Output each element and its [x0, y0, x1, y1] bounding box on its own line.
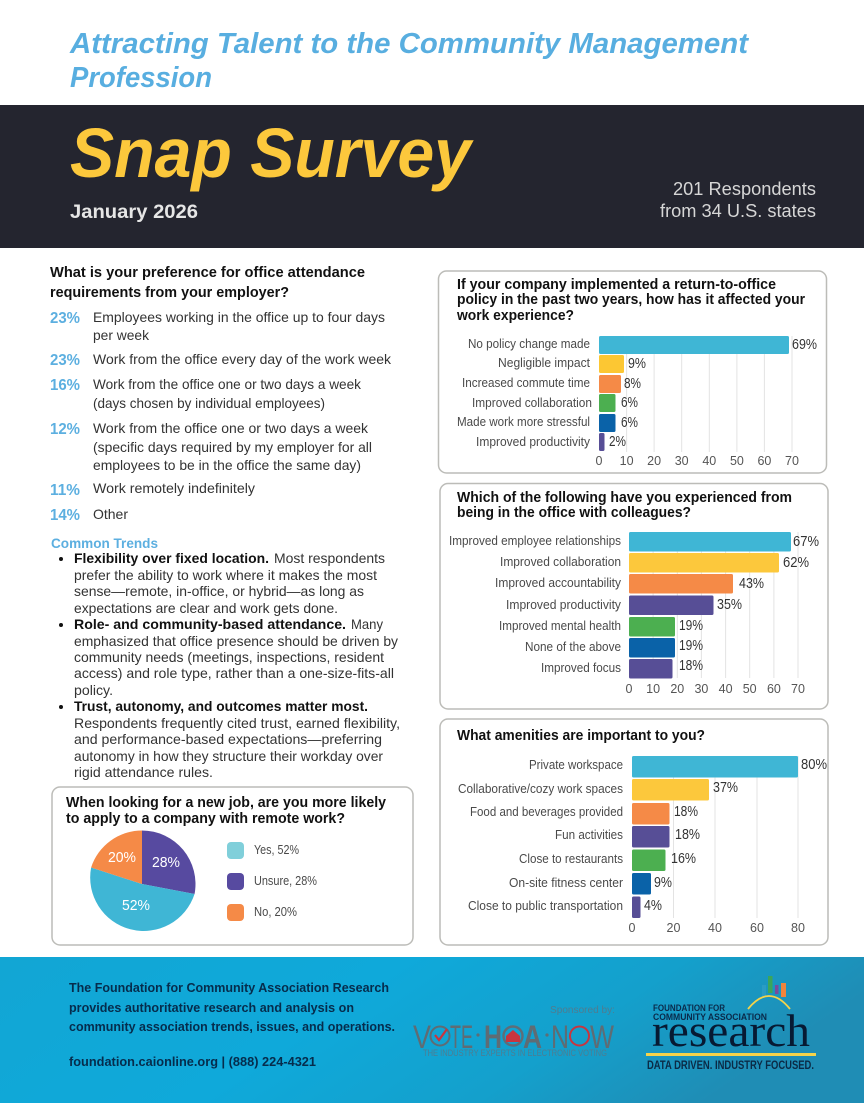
bar chart: 69%: [792, 337, 817, 353]
bar chart: 19%: [679, 638, 703, 654]
bullet: role and community: community needs (meetings, inspections, resident: [74, 649, 384, 665]
percentages: 14%: [50, 507, 80, 524]
heading: [50, 265, 365, 301]
bar chart: [449, 532, 819, 696]
bar chart: 6%: [621, 395, 638, 411]
heading: [457, 490, 792, 521]
bar chart: Improved productivity: [506, 598, 622, 612]
heading: policy in the past two years, how has it affected your: [457, 292, 805, 308]
bar chart: 40: [719, 682, 733, 696]
heading: [66, 795, 386, 827]
legend: Unsure, 28%: [254, 873, 317, 888]
bar chart: Improved focus: [541, 661, 621, 675]
legend: Yes, 52%: [254, 842, 299, 857]
panel: experienced in the office: [440, 484, 828, 709]
bar chart: Made work more stressful: [457, 415, 590, 429]
panel: return-to-office effect: [438, 271, 826, 473]
bullet: flexibility: prefer the ability to work where it makes the most: [74, 567, 377, 583]
bullet: trust and autonomy: [59, 698, 400, 780]
bar chart: 0: [596, 454, 603, 468]
bar chart: 40: [708, 921, 722, 935]
bar chart: On-site fitness center: [509, 876, 623, 890]
legend: [227, 842, 317, 921]
bar chart: Fun activities: [555, 828, 623, 842]
heading: being in the office with colleagues?: [457, 505, 691, 521]
heading: to apply to a company with remote work?: [66, 811, 345, 827]
bullet: flexibility: expectations are clear and work gets done.: [74, 600, 338, 616]
sponsor logo: Vote HOA Now: W: [590, 1019, 615, 1055]
percentages: 23%: [50, 310, 80, 327]
heading: Which of the following have you experienced from: [457, 490, 792, 506]
sponsor logo: Vote HOA Now: A: [523, 1019, 542, 1055]
bullet: flexibility: Most respondents: [274, 550, 385, 566]
logo: Foundation research: COMMUNITY ASSOCIATION: [653, 1012, 767, 1022]
responses: Work from the office one or two days a week: [93, 376, 362, 392]
foundation description: provides authoritative research and analysis on: [69, 1000, 354, 1015]
bar chart: 10: [620, 454, 634, 468]
bar chart: 18%: [674, 804, 698, 820]
responses: employees to be in the office the same day): [93, 457, 361, 473]
heading: When looking for a new job, are you more likely: [66, 795, 386, 811]
bar chart: Improved mental health: [499, 619, 621, 633]
bar chart: 35%: [717, 597, 742, 613]
bar chart: Negligible impact: [498, 356, 591, 370]
sponsor logo: Vote HOA Now: Sponsored by:: [550, 1005, 615, 1016]
bar chart: 20: [647, 454, 661, 468]
header band: [0, 105, 864, 248]
bar chart: 60: [750, 921, 764, 935]
bar chart: 18%: [675, 827, 700, 843]
bar chart: 18%: [679, 658, 703, 674]
percentages: [50, 310, 80, 524]
bar chart: 30: [675, 454, 689, 468]
pie chart: 52%: [122, 897, 150, 914]
bar chart: None of the above: [525, 640, 621, 654]
bar chart: 6%: [621, 415, 638, 431]
bar chart: 8%: [624, 376, 641, 392]
bullet: role and community: Role- and community-based attendance.: [74, 616, 346, 632]
bar chart: 80: [791, 921, 805, 935]
contact details: foundation.caionline.org | (888) 224-4321: [69, 1054, 316, 1069]
bar chart: 0: [629, 921, 636, 935]
bar chart: Close to public transportation: [468, 899, 623, 913]
heading: work experience?: [456, 308, 574, 324]
respondents note: 201 Respondents: [673, 179, 816, 199]
bar chart: 0: [626, 682, 633, 696]
bullet: flexibility: sense—remote, in-office, or hybrid—as long as: [74, 583, 364, 599]
bullet: role and community: emphasized that office presence should be driven by: [74, 633, 398, 649]
panel: amenities: [440, 719, 828, 945]
bar chart: Increased commute time: [462, 376, 590, 390]
bar chart: Private workspace: [529, 758, 623, 772]
logo: Foundation research: DATA DRIVEN. INDUSTRY FOCUSED.: [647, 1060, 814, 1072]
bar chart: Improved collaboration: [500, 555, 621, 569]
title: Profession: [70, 62, 212, 94]
bar chart: [457, 336, 817, 468]
bar chart: Close to restaurants: [519, 852, 623, 866]
bullet: trust and autonomy: autonomy in how they structure their workday over: [74, 748, 383, 764]
foundation description: The Foundation for Community Association Research: [69, 980, 389, 995]
bar chart: Improved collaboration: [472, 396, 592, 410]
title: [69, 28, 749, 94]
responses: Employees working in the office up to four days: [93, 309, 385, 325]
logo: Foundation research: research: [652, 1005, 810, 1056]
pie chart: 20%: [108, 849, 136, 866]
bar chart: 60: [767, 682, 781, 696]
bullet: role and community: access) and role type, rather than a one-size-fits-all: [74, 665, 394, 681]
panel: remote work pie: [52, 787, 413, 945]
bar chart: 62%: [783, 555, 809, 571]
bullet: trust and autonomy: and performance-based expectations—preferring: [74, 731, 382, 747]
heading: Common Trends: [51, 535, 158, 551]
heading: Snap Survey: Snap Survey: [70, 114, 474, 192]
percentages: 12%: [50, 421, 80, 438]
legend: No, 20%: [254, 904, 297, 919]
logo: Foundation research: FOUNDATION FOR: [653, 1003, 725, 1013]
bar chart: No policy change made: [468, 337, 590, 351]
bar chart: 19%: [679, 618, 703, 634]
percentages: 16%: [50, 377, 80, 394]
bullet: trust and autonomy: rigid attendance rules.: [74, 764, 213, 780]
bullet: trust and autonomy: Respondents frequently cited trust, earned flexibility,: [74, 715, 400, 731]
bar chart: 4%: [644, 898, 662, 914]
responses: Other: [93, 506, 128, 522]
bar chart: Food and beverages provided: [470, 805, 623, 819]
bar chart: 70: [785, 454, 799, 468]
bar chart: 50: [743, 682, 757, 696]
bar chart: Improved employee relationships: [449, 534, 621, 548]
title: Attracting Talent to the Community Management: [69, 28, 749, 60]
bar chart: Improved accountability: [495, 576, 622, 590]
bar chart: 40: [702, 454, 716, 468]
bar chart: Collaborative/cozy work spaces: [458, 782, 623, 796]
footer band: [0, 957, 864, 1103]
sponsor logo: Vote HOA Now: H: [484, 1019, 502, 1055]
pie chart: [90, 830, 195, 931]
bar chart: 30: [694, 682, 708, 696]
bar chart: 20: [667, 921, 680, 935]
bullet: flexibility: Flexibility over fixed location.: [74, 550, 269, 566]
heading: What is your preference for office attendance: [50, 265, 365, 281]
respondents note: from 34 U.S. states: [660, 201, 816, 221]
responses: per week: [93, 327, 150, 343]
bar chart: 70: [791, 682, 805, 696]
bar chart: 20: [670, 682, 684, 696]
bar chart: Improved productivity: [476, 435, 591, 449]
responses: (specific days required by my employer for all: [93, 439, 372, 455]
panel: office attendance preference: [50, 265, 392, 524]
heading: [456, 277, 805, 324]
heading: If your company implemented a return-to-office: [457, 277, 776, 293]
bullet: role and community: [59, 616, 398, 698]
panel: common trends: [51, 535, 400, 780]
responses: [93, 309, 392, 522]
bar chart: 10: [646, 682, 660, 696]
logo: Foundation research: [646, 976, 816, 1072]
respondents note: [660, 179, 816, 221]
survey date: January 2026: [70, 202, 198, 223]
percentages: 23%: [50, 352, 80, 369]
heading: requirements from your employer?: [50, 285, 289, 301]
sponsor logo: Vote HOA Now: N: [551, 1019, 569, 1055]
bar chart: 9%: [654, 875, 672, 891]
bullet: trust and autonomy: Trust, autonomy, and outcomes matter most.: [74, 698, 368, 714]
responses: (days chosen by individual employees): [93, 395, 325, 411]
bar chart: 80%: [801, 757, 827, 773]
sponsor logo: Vote HOA Now: V: [413, 1019, 432, 1055]
sponsor logo: Vote HOA Now: THE INDUSTRY EXPERTS IN ELECTRONIC VOTING: [423, 1048, 607, 1059]
foundation description: [69, 980, 395, 1034]
bar chart: 2%: [609, 434, 626, 450]
bar chart: 60: [757, 454, 771, 468]
responses: Work from the office every day of the work week: [93, 351, 392, 367]
bar chart: 43%: [739, 576, 764, 592]
bullet: role and community: policy.: [74, 682, 113, 698]
bar chart: [458, 756, 827, 935]
pie chart: 28%: [152, 854, 180, 871]
percentages: 11%: [50, 482, 80, 499]
sponsor logo: Vote HOA Now: [413, 1005, 615, 1059]
bullet: role and community: Many: [351, 616, 383, 632]
bullet: flexibility: [59, 550, 385, 616]
heading: What amenities are important to you?: [457, 728, 705, 744]
responses: Work remotely indefinitely: [93, 480, 255, 496]
responses: Work from the office one or two days a week: [93, 420, 369, 436]
foundation description: community association trends, issues, and operations.: [69, 1019, 395, 1034]
bar chart: 67%: [793, 534, 819, 550]
sponsor logo: Vote HOA Now: TE: [450, 1019, 473, 1055]
bar chart: 16%: [671, 851, 696, 867]
bar chart: 50: [730, 454, 744, 468]
bar chart: 37%: [713, 780, 738, 796]
bar chart: 9%: [628, 356, 646, 372]
